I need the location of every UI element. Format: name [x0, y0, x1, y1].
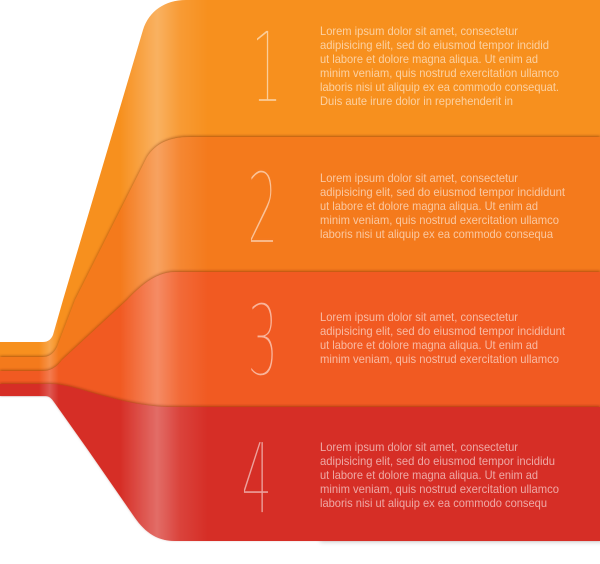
- panel 3: orange-red band: [0, 270, 600, 407]
- text block 1: ut labore et dolore magna aliqua. Ut enim ad: [320, 52, 538, 66]
- panel 2: dark orange band: [0, 130, 600, 420]
- text block 3: ut labore et dolore magna aliqua. Ut enim ad: [320, 338, 538, 352]
- text block 1: Lorem ipsum dolor sit amet, consectetur: [320, 24, 518, 38]
- text block 4: Lorem ipsum dolor sit amet, consectetur: [320, 440, 518, 454]
- text block 2: laboris nisi ut aliquip ex ea commodo consequa: [320, 227, 553, 241]
- text block 4: ut labore et dolore magna aliqua. Ut enim ad: [320, 468, 538, 482]
- numeral 2: 2: [247, 152, 278, 267]
- text block 3: [320, 310, 566, 366]
- text block 1: minim veniam, quis nostrud exercitation ullamco: [320, 66, 559, 80]
- text block 3: Lorem ipsum dolor sit amet, consectetur: [320, 310, 518, 324]
- text block 1: Duis aute irure dolor in reprehenderit in: [320, 94, 513, 108]
- text block 3: adipisicing elit, sed do eiusmod tempor incididunt: [320, 324, 566, 338]
- text block 4: adipisicing elit, sed do eiusmod tempor incididu: [320, 454, 555, 468]
- text block 4: [320, 440, 559, 510]
- text block 4: laboris nisi ut aliquip ex ea commodo consequ: [320, 496, 547, 510]
- panel 1: orange band: [0, 0, 600, 357]
- text block 1: adipisicing elit, sed do eiusmod tempor incidid: [320, 38, 549, 52]
- text block 2: [320, 171, 566, 241]
- text block 2: adipisicing elit, sed do eiusmod tempor incididunt: [320, 185, 566, 199]
- text block 2: minim veniam, quis nostrud exercitation ullamco: [320, 213, 559, 227]
- panel 4: red band: [0, 380, 600, 545]
- text block 3: minim veniam, quis nostrud exercitation ullamco: [320, 352, 559, 366]
- text block 2: Lorem ipsum dolor sit amet, consectetur: [320, 171, 518, 185]
- bottom shadow: [320, 538, 600, 542]
- text block 1: [320, 24, 559, 108]
- numeral 3: 3: [247, 284, 278, 399]
- numeral 4: 4: [241, 422, 272, 537]
- text block 4: minim veniam, quis nostrud exercitation ullamco: [320, 482, 559, 496]
- numeral 1: 1: [251, 11, 282, 126]
- text block 1: laboris nisi ut aliquip ex ea commodo consequat.: [320, 80, 559, 94]
- text block 2: ut labore et dolore magna aliqua. Ut enim ad: [320, 199, 538, 213]
